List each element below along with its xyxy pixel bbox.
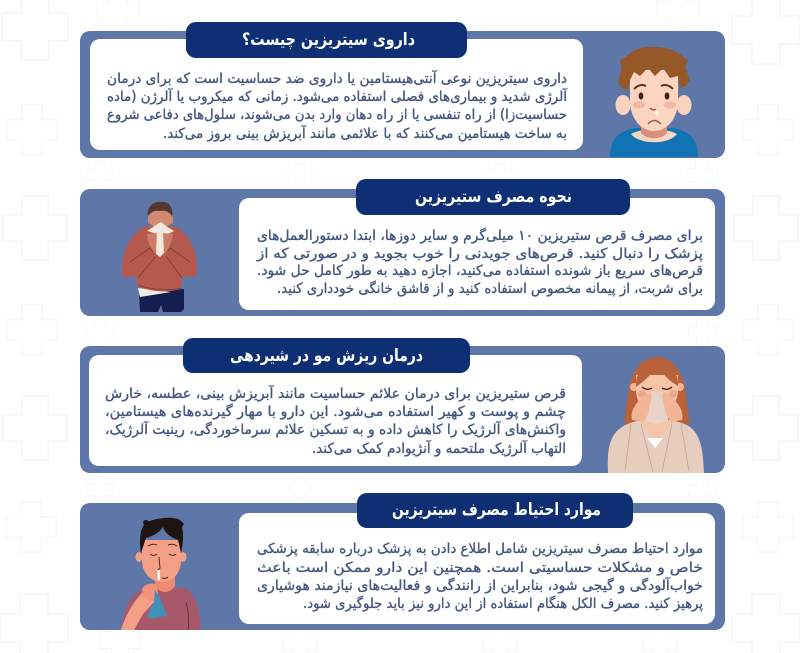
- text card: precautions: [239, 513, 715, 624]
- text block: precautions: خاص و مشکلات حساسیتی است. همچنین این دارو ممکن است باعث: [257, 560, 703, 576]
- text block: treatment: التهاب آلرژیک ملتحمه و آنژیوادم کمک می‌کند.: [312, 440, 566, 457]
- panel: how to use: [80, 189, 725, 316]
- heading: how to use: نحوه مصرف ستیریزین: [415, 187, 572, 207]
- heading: how to use: [356, 179, 630, 215]
- text block: how to use: قرص‌های سریع باز شونده استفاده می‌کنید، اجازه دهید به طور کامل حل شود.: [257, 263, 703, 279]
- text block: how to use: پزشک را دنبال کنید. قرص‌های جویدنی را خوب بجوید و در صورتی که از: [256, 246, 703, 262]
- icon: sad boy with runny nose: [610, 46, 698, 157]
- text block: what is cetirizine: حساسیت‌زا) از راه تنفسی یا از راه دهان وارد بدن می‌شوند، سلول‌های دفاعی شروع: [107, 107, 567, 123]
- text block: what is cetirizine: به ساخت هیستامین می‌کنند که با علائمی مانند آبریزش بینی بروز می‌کند.: [163, 125, 567, 142]
- text block: how to use: برای مصرف قرص ستیریزین ۱۰ میلی‌گرم و سایر دوزها، ابتدا دستورالعمل‌های: [257, 227, 703, 244]
- text block: treatment: واکنش‌های آلرژیک را کاهش داده و به تسکین علائم سرماخوردگی، رینیت آلرژیک،: [105, 421, 566, 438]
- text block: what is cetirizine: داروی سیتریزین نوعی آنتی‌هیستامین یا داروی ضد حساسیت است که برای درمان: [107, 70, 567, 87]
- icon: woman with tissue: [608, 357, 704, 473]
- heading: treatment: درمان ریزش مو در شیردهی: [230, 346, 423, 366]
- heading: precautions: [357, 493, 633, 528]
- text block: precautions: پرهیز کنید. مصرف الکل هنگام استفاده از این دارو نیز باید جلوگیری شود.: [303, 595, 703, 612]
- text block: treatment: [105, 384, 566, 457]
- icon: man with runny nose and tissue: [121, 518, 201, 630]
- text card: treatment: [89, 355, 582, 466]
- icon: man blowing nose: [122, 202, 197, 312]
- text block: treatment: قرص ستیریزین برای درمان علائم حساسیت مانند آبریزش بینی، عطسه، خارش: [105, 385, 566, 402]
- text block: treatment: چشم و پوست و کهیر استفاده می‌شود. این دارو با مهار گیرنده‌های هیستامین،: [105, 403, 566, 420]
- heading: treatment: [183, 338, 470, 373]
- text block: precautions: خواب‌آلودگی و گیجی شود، بنابراین از رانندگی و فعالیت‌های نیازمند هوشیاری: [257, 577, 703, 594]
- text block: precautions: [257, 541, 703, 612]
- text block: what is cetirizine: آلرژی شدید و بیماری‌های فصلی استفاده می‌شود. زمانی که میکروب یا آلرژن (ماده: [107, 88, 568, 105]
- text card: how to use: [239, 198, 715, 310]
- panel: precautions: [80, 503, 725, 630]
- text block: what is cetirizine: [107, 70, 568, 142]
- heading: what is cetirizine: [186, 22, 467, 58]
- text block: precautions: موارد احتیاط مصرف سیتریزین شامل اطلاع دادن به پزشک درباره سابقه پزشکی: [257, 541, 703, 557]
- heading: what is cetirizine: داروی سیتریزین چیست؟: [242, 30, 415, 50]
- text card: what is cetirizine: [90, 39, 583, 150]
- text block: how to use: برای شربت، از پیمانه مخصوص استفاده کنید و از قاشق خانگی خودداری کنید.: [277, 280, 703, 297]
- heading: precautions: موارد احتیاط مصرف سیتریزین: [392, 500, 601, 520]
- panel: treatment: [80, 346, 725, 473]
- panel: what is cetirizine: [80, 31, 725, 158]
- text block: how to use: [256, 227, 703, 297]
